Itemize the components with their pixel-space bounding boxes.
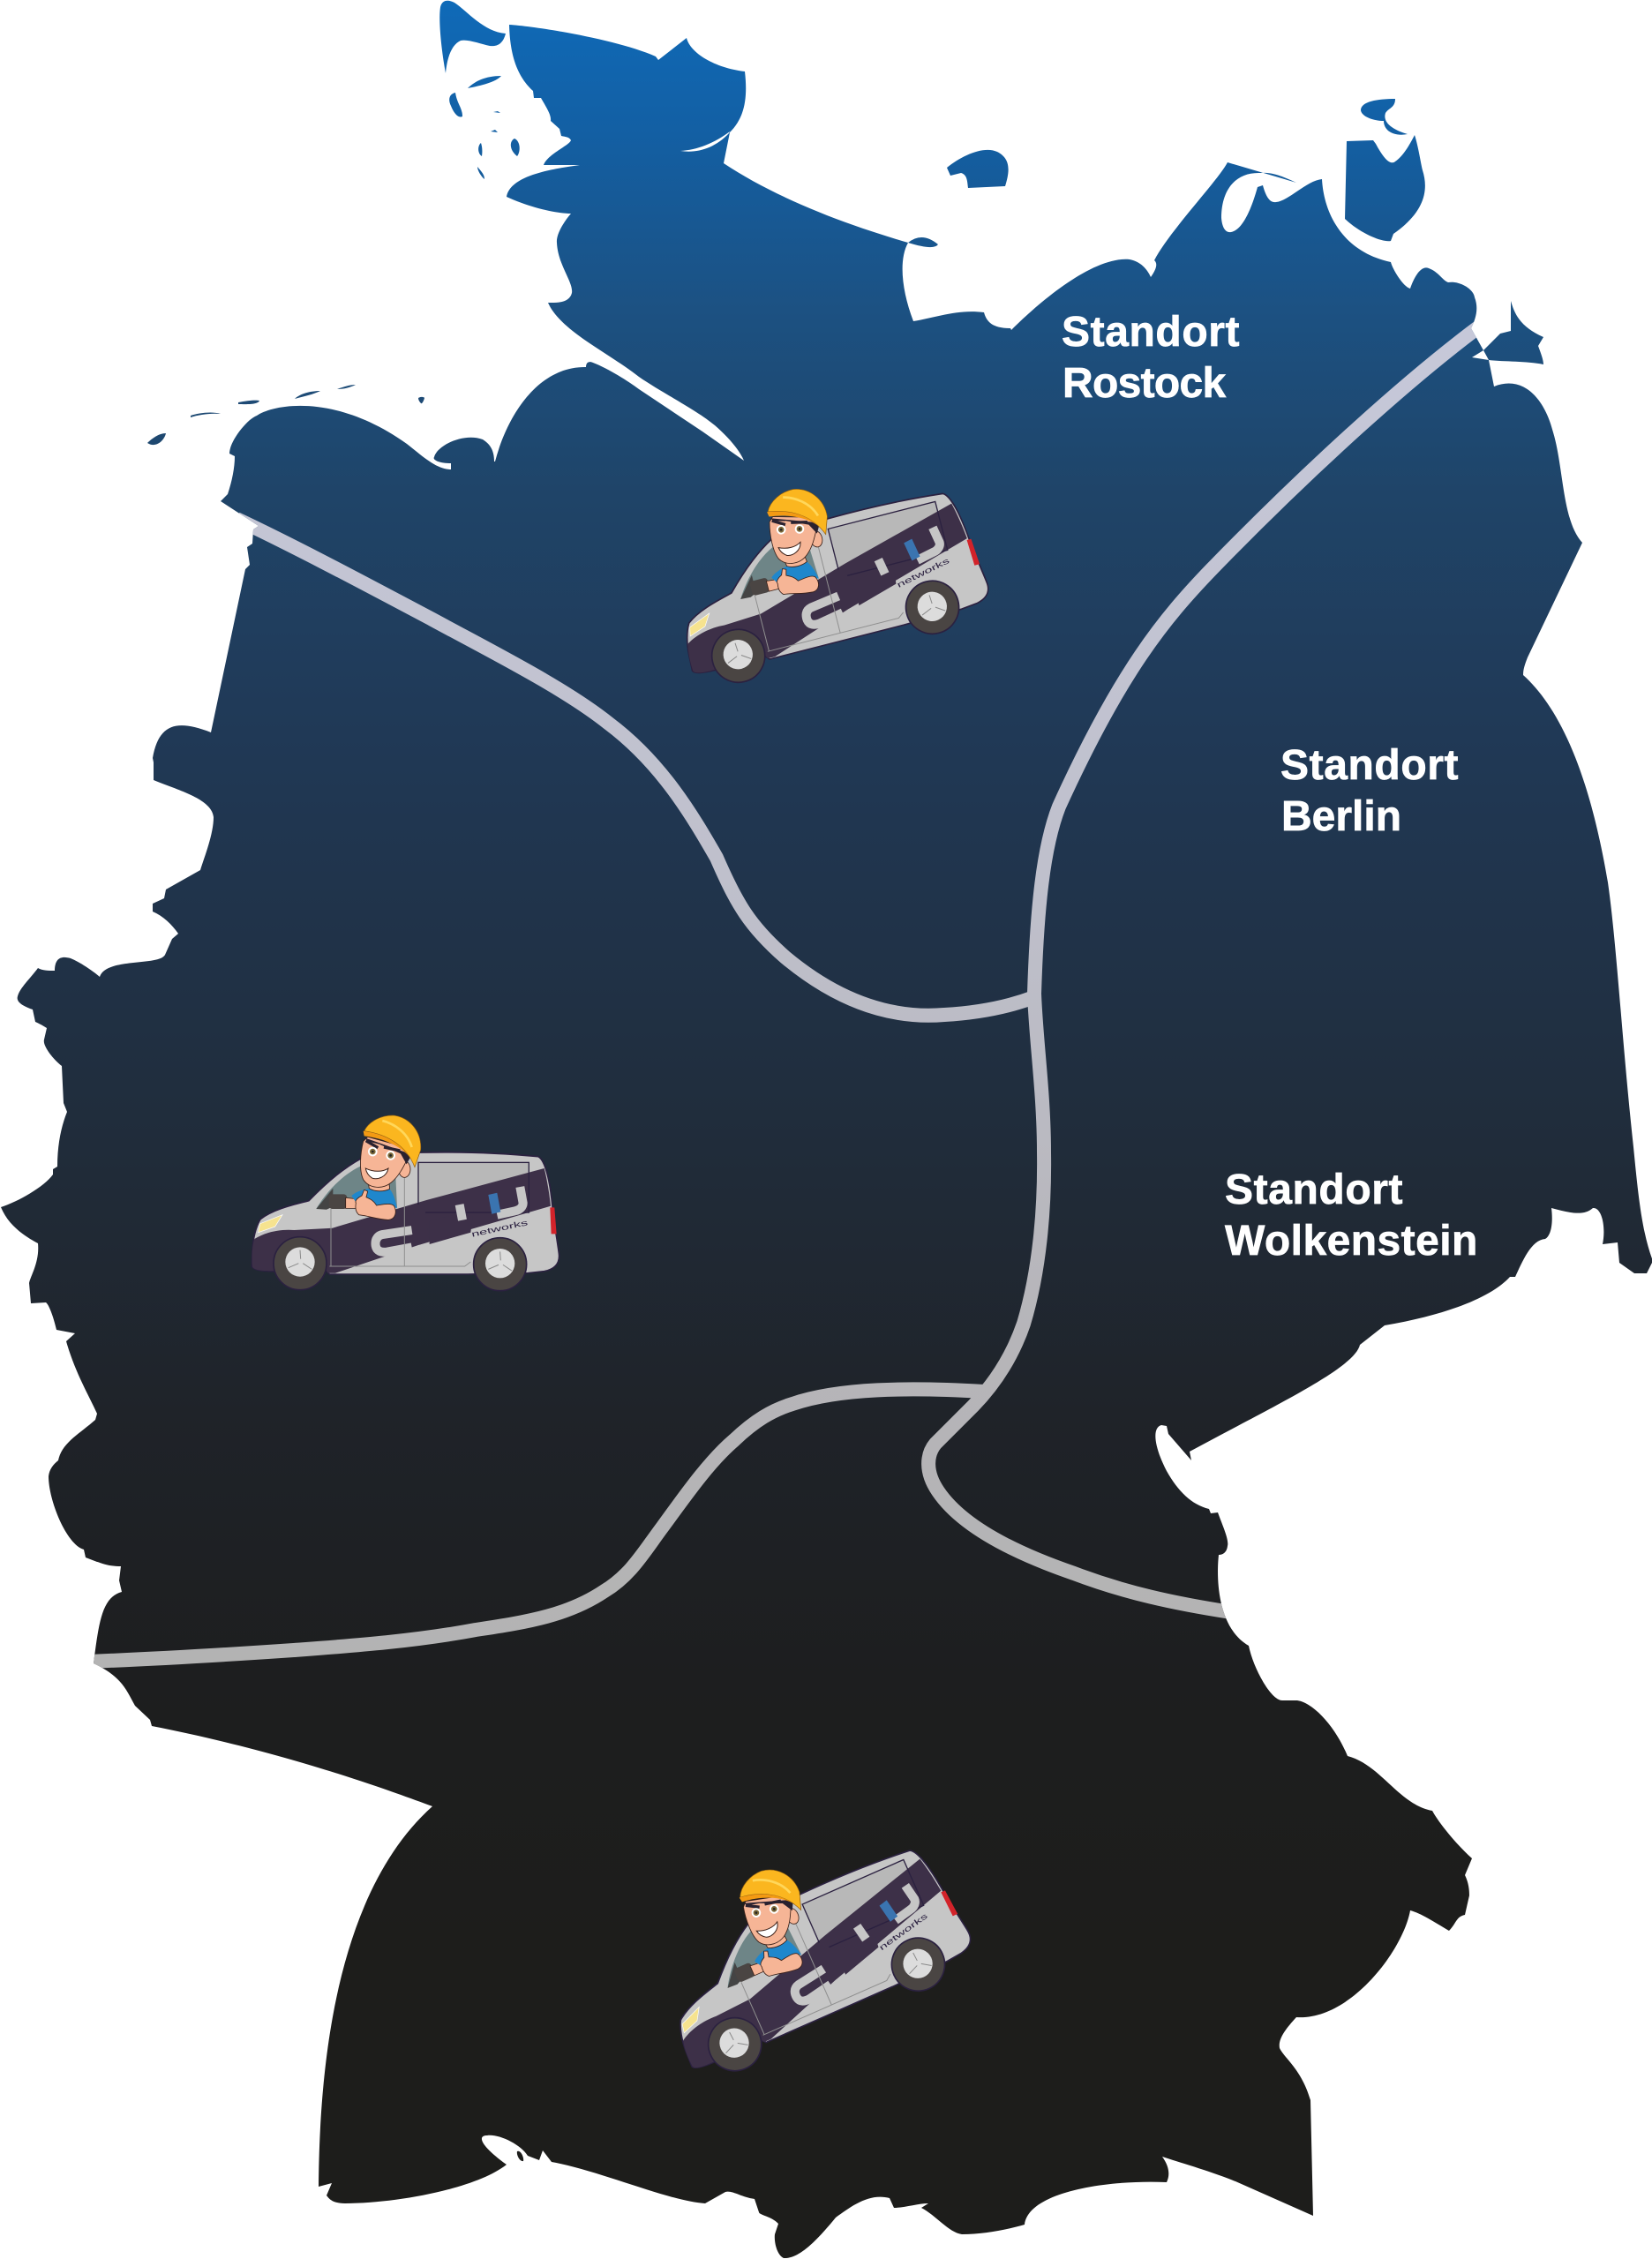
label: Standort Wolkenstein: Wolkenstein: [1225, 1218, 1478, 1265]
label: Standort Wolkenstein: Standort: [1225, 1167, 1403, 1213]
van with worker: north: networks: [896, 556, 951, 589]
label: Standort Rostock: Rostock: [1063, 360, 1226, 407]
islands: North Sea and Baltic: [147, 1, 1543, 445]
worker: [351, 1115, 421, 1220]
boundary: northwest: [237, 519, 1034, 1016]
van with worker: south: [631, 1805, 983, 2089]
label: Standort Rostock: Standort: [1062, 309, 1240, 356]
van with worker: west: networks: [470, 1218, 529, 1239]
boundary: southwest: [86, 1389, 984, 1662]
van with worker: south: networks: [877, 1911, 930, 1952]
region boundary lines: [86, 318, 1491, 1662]
small island in the south lake: [517, 2151, 523, 2161]
van with worker: north: [655, 448, 996, 694]
label: Standort Berlin: Berlin: [1281, 793, 1401, 840]
worker: [722, 1860, 828, 1984]
boundary: northeast to south: [928, 318, 1491, 1612]
van with worker: west: [252, 1115, 559, 1291]
label: Standort Berlin: Standort: [1280, 742, 1459, 789]
white sliver on the west coast: [680, 131, 730, 152]
worker: [752, 483, 845, 601]
